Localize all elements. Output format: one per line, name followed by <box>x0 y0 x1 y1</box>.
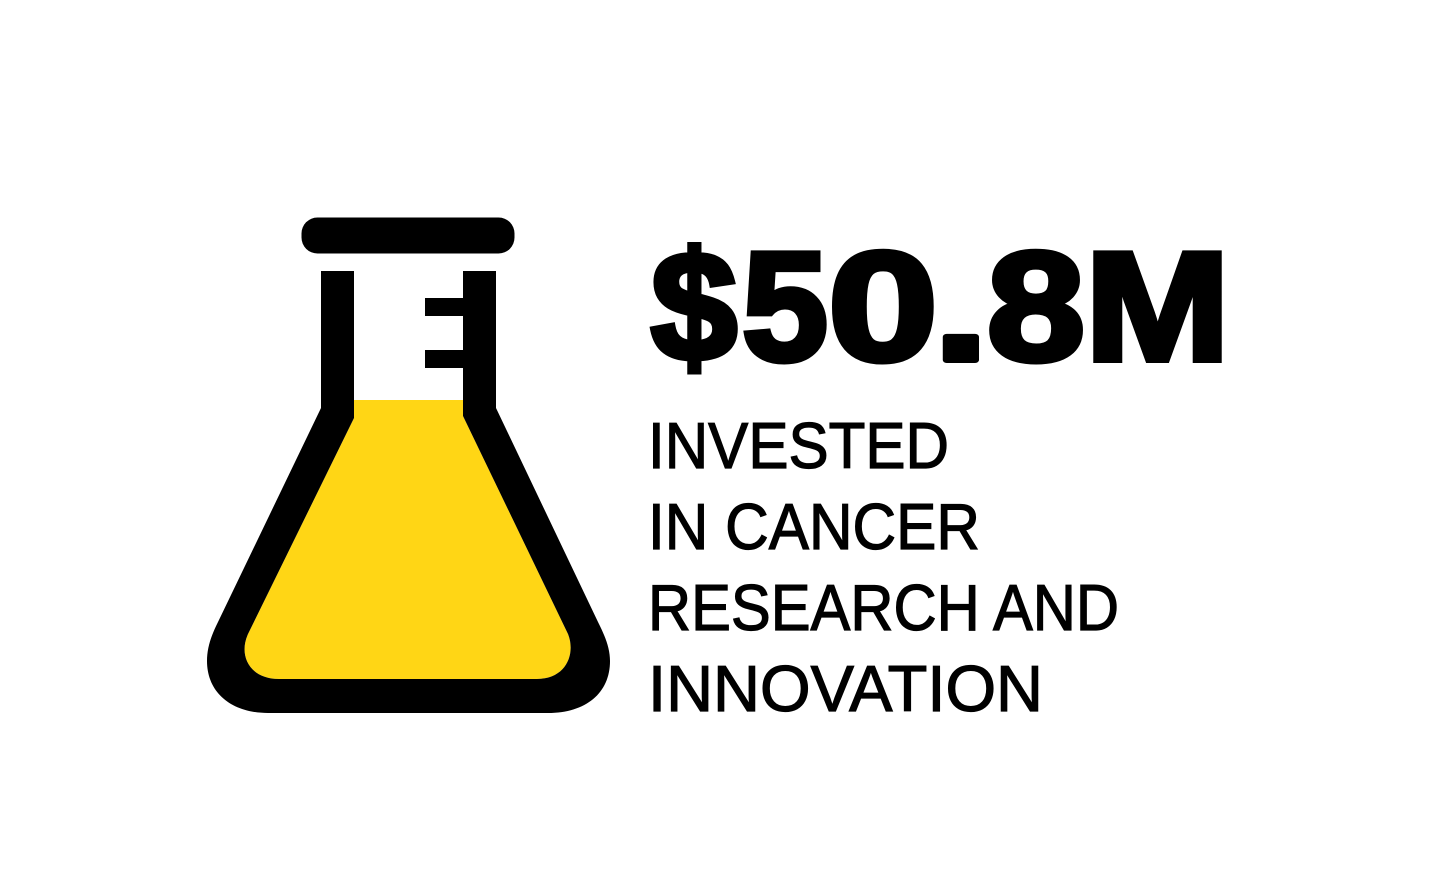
headline figure <box>651 220 1230 393</box>
flask outline <box>207 271 610 713</box>
description text: RESEARCH AND <box>648 571 1119 644</box>
flask tick marks <box>425 298 465 368</box>
headline figure: . <box>933 220 989 393</box>
flask liquid <box>245 400 571 679</box>
description text: IN CANCER <box>648 490 980 563</box>
description text: INVESTED <box>648 409 949 482</box>
headline figure: 5 <box>742 220 828 393</box>
headline figure: $ <box>651 220 737 393</box>
headline figure: 0 <box>828 220 938 393</box>
icon: flask <box>207 218 610 713</box>
headline figure: M <box>1085 220 1230 393</box>
description text: INNOVATION <box>648 652 1043 725</box>
flask lid <box>302 218 514 254</box>
description text <box>648 409 1119 725</box>
headline figure: 8 <box>987 220 1085 393</box>
